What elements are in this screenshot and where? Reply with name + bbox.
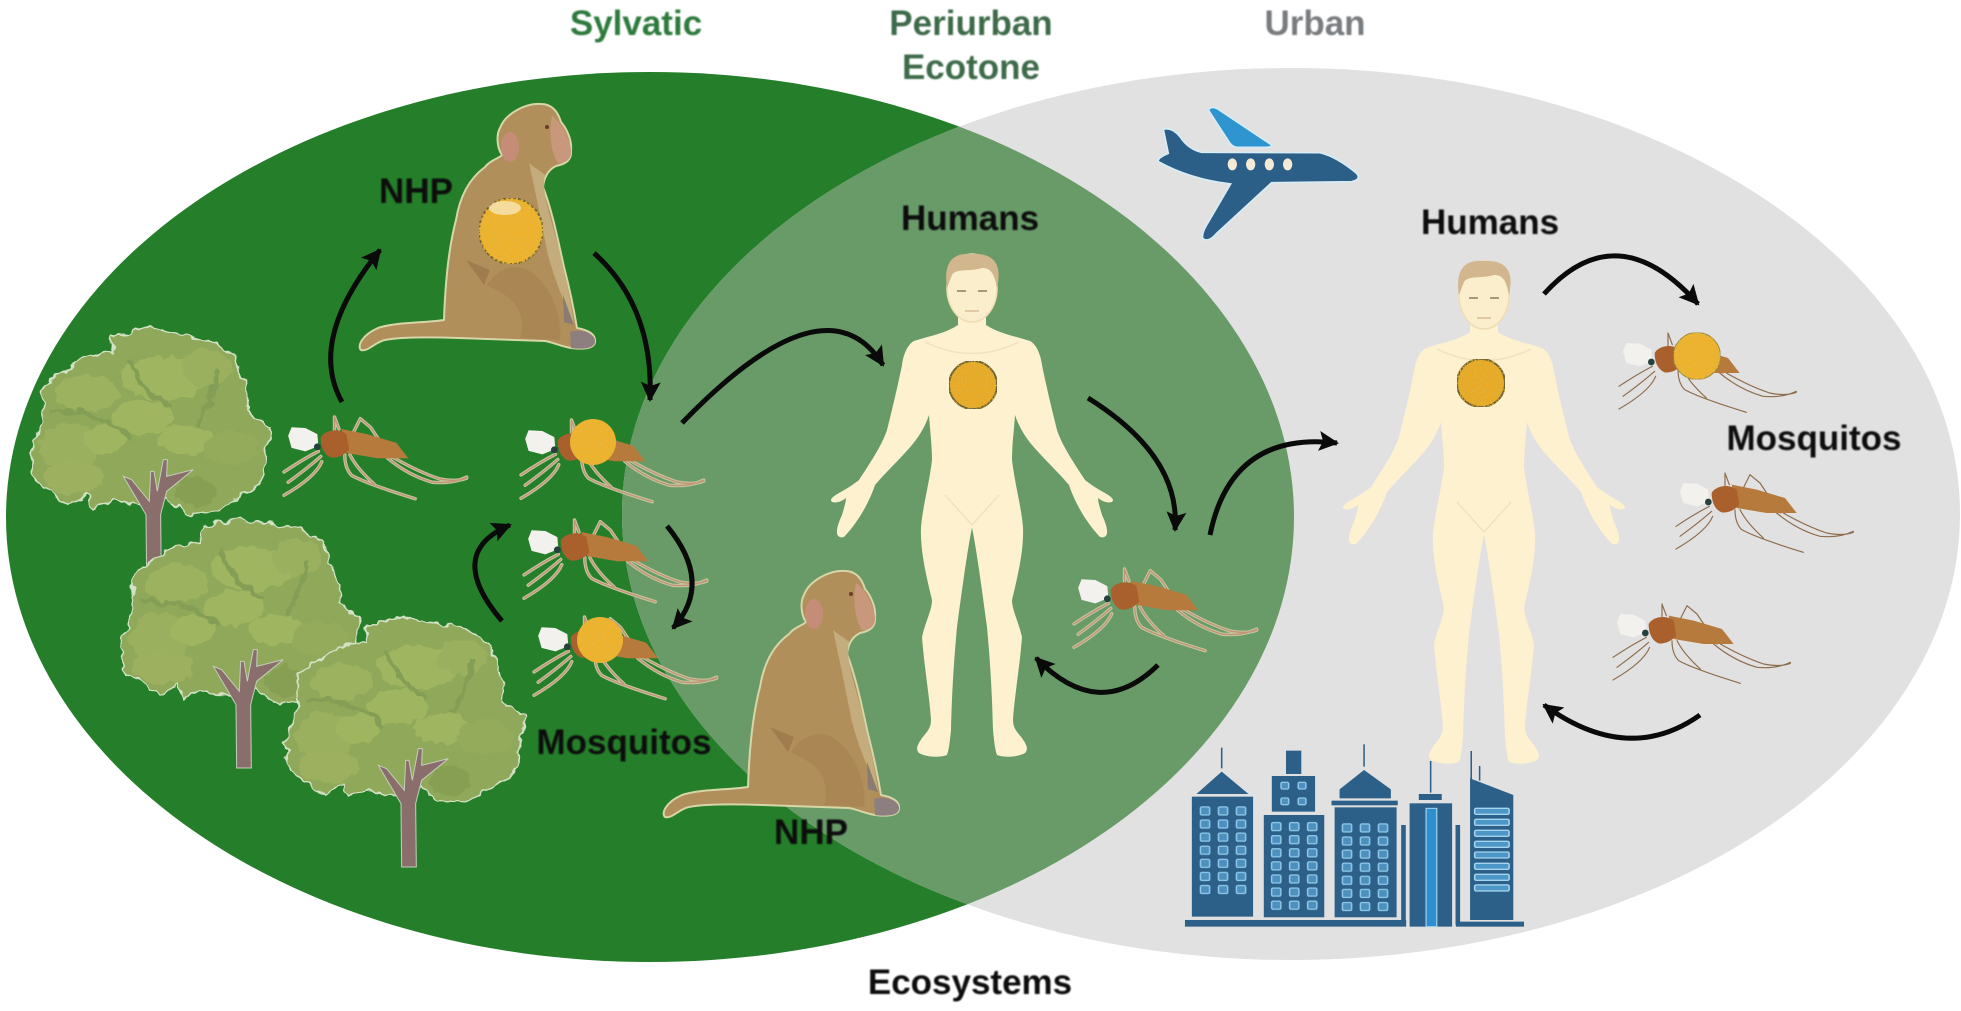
caption: Ecosystems: Ecosystems xyxy=(868,963,1072,1002)
arrow: monkey to mosquito xyxy=(594,253,650,400)
arrow: human to mosquito 5 xyxy=(1088,398,1175,530)
arrow: urban mosquito to human xyxy=(1544,705,1700,738)
human: urban xyxy=(1343,261,1625,764)
arrow: mosquito cycle left xyxy=(475,525,510,621)
mosquito 5 periurban xyxy=(1074,569,1257,651)
label: Mosquitos urban: Mosquitos xyxy=(1727,419,1901,458)
icon: airplane xyxy=(1158,107,1358,240)
heading: Periurban Ecotone: Periurban xyxy=(889,4,1053,43)
panel: urban ellipse xyxy=(622,68,1960,960)
infection sphere on monkey xyxy=(479,198,543,264)
label: NHP periurban: NHP xyxy=(774,813,848,852)
mosquito 2 infected xyxy=(521,419,704,502)
sphere on periurban human xyxy=(949,361,997,409)
heading: Urban: Urban xyxy=(1264,4,1366,43)
arrow: mosquito to periurban human xyxy=(682,330,883,423)
sphere on urban human xyxy=(1457,359,1505,407)
heading: Sylvatic: Sylvatic xyxy=(570,4,702,43)
human: periurban xyxy=(831,254,1113,757)
arrow: mosquito to monkey xyxy=(331,250,380,402)
mosquito 6 urban infected xyxy=(1619,332,1796,412)
sphere on mosquito 2 xyxy=(570,419,616,465)
panel: periurban overlap xyxy=(622,126,1294,904)
arrow: urban human to mosquito xyxy=(1544,256,1698,304)
icon: city buildings xyxy=(1185,744,1524,927)
mosquito 4 infected xyxy=(534,617,717,699)
tree 3 xyxy=(285,617,525,867)
mosquito 7 urban xyxy=(1676,473,1853,552)
arrow: mosquito cycle right xyxy=(667,526,692,628)
sphere on mosquito 6 xyxy=(1674,332,1720,380)
heading: Periurban Ecotone: Ecotone xyxy=(902,48,1040,87)
sphere on mosquito 4 xyxy=(577,617,623,663)
panel: sylvatic ellipse xyxy=(6,72,1294,962)
monkey: sylvatic NHP xyxy=(360,104,595,350)
mosquito 3 xyxy=(524,520,707,602)
tree 2 xyxy=(120,518,360,768)
label: Humans urban: Humans xyxy=(1421,203,1559,242)
mosquito 8 urban xyxy=(1613,604,1790,683)
arrow: mosquito 5 to human xyxy=(1036,658,1158,692)
label: NHP sylvatic: NHP xyxy=(379,172,453,211)
label: Humans periurban: Humans xyxy=(901,199,1039,238)
tree 1 xyxy=(30,328,270,578)
monkey: periurban NHP xyxy=(664,571,899,817)
mosquito 1 xyxy=(284,417,467,499)
arrow: periurban to urban xyxy=(1210,442,1337,535)
label: Mosquitos sylvatic: Mosquitos xyxy=(537,723,711,762)
